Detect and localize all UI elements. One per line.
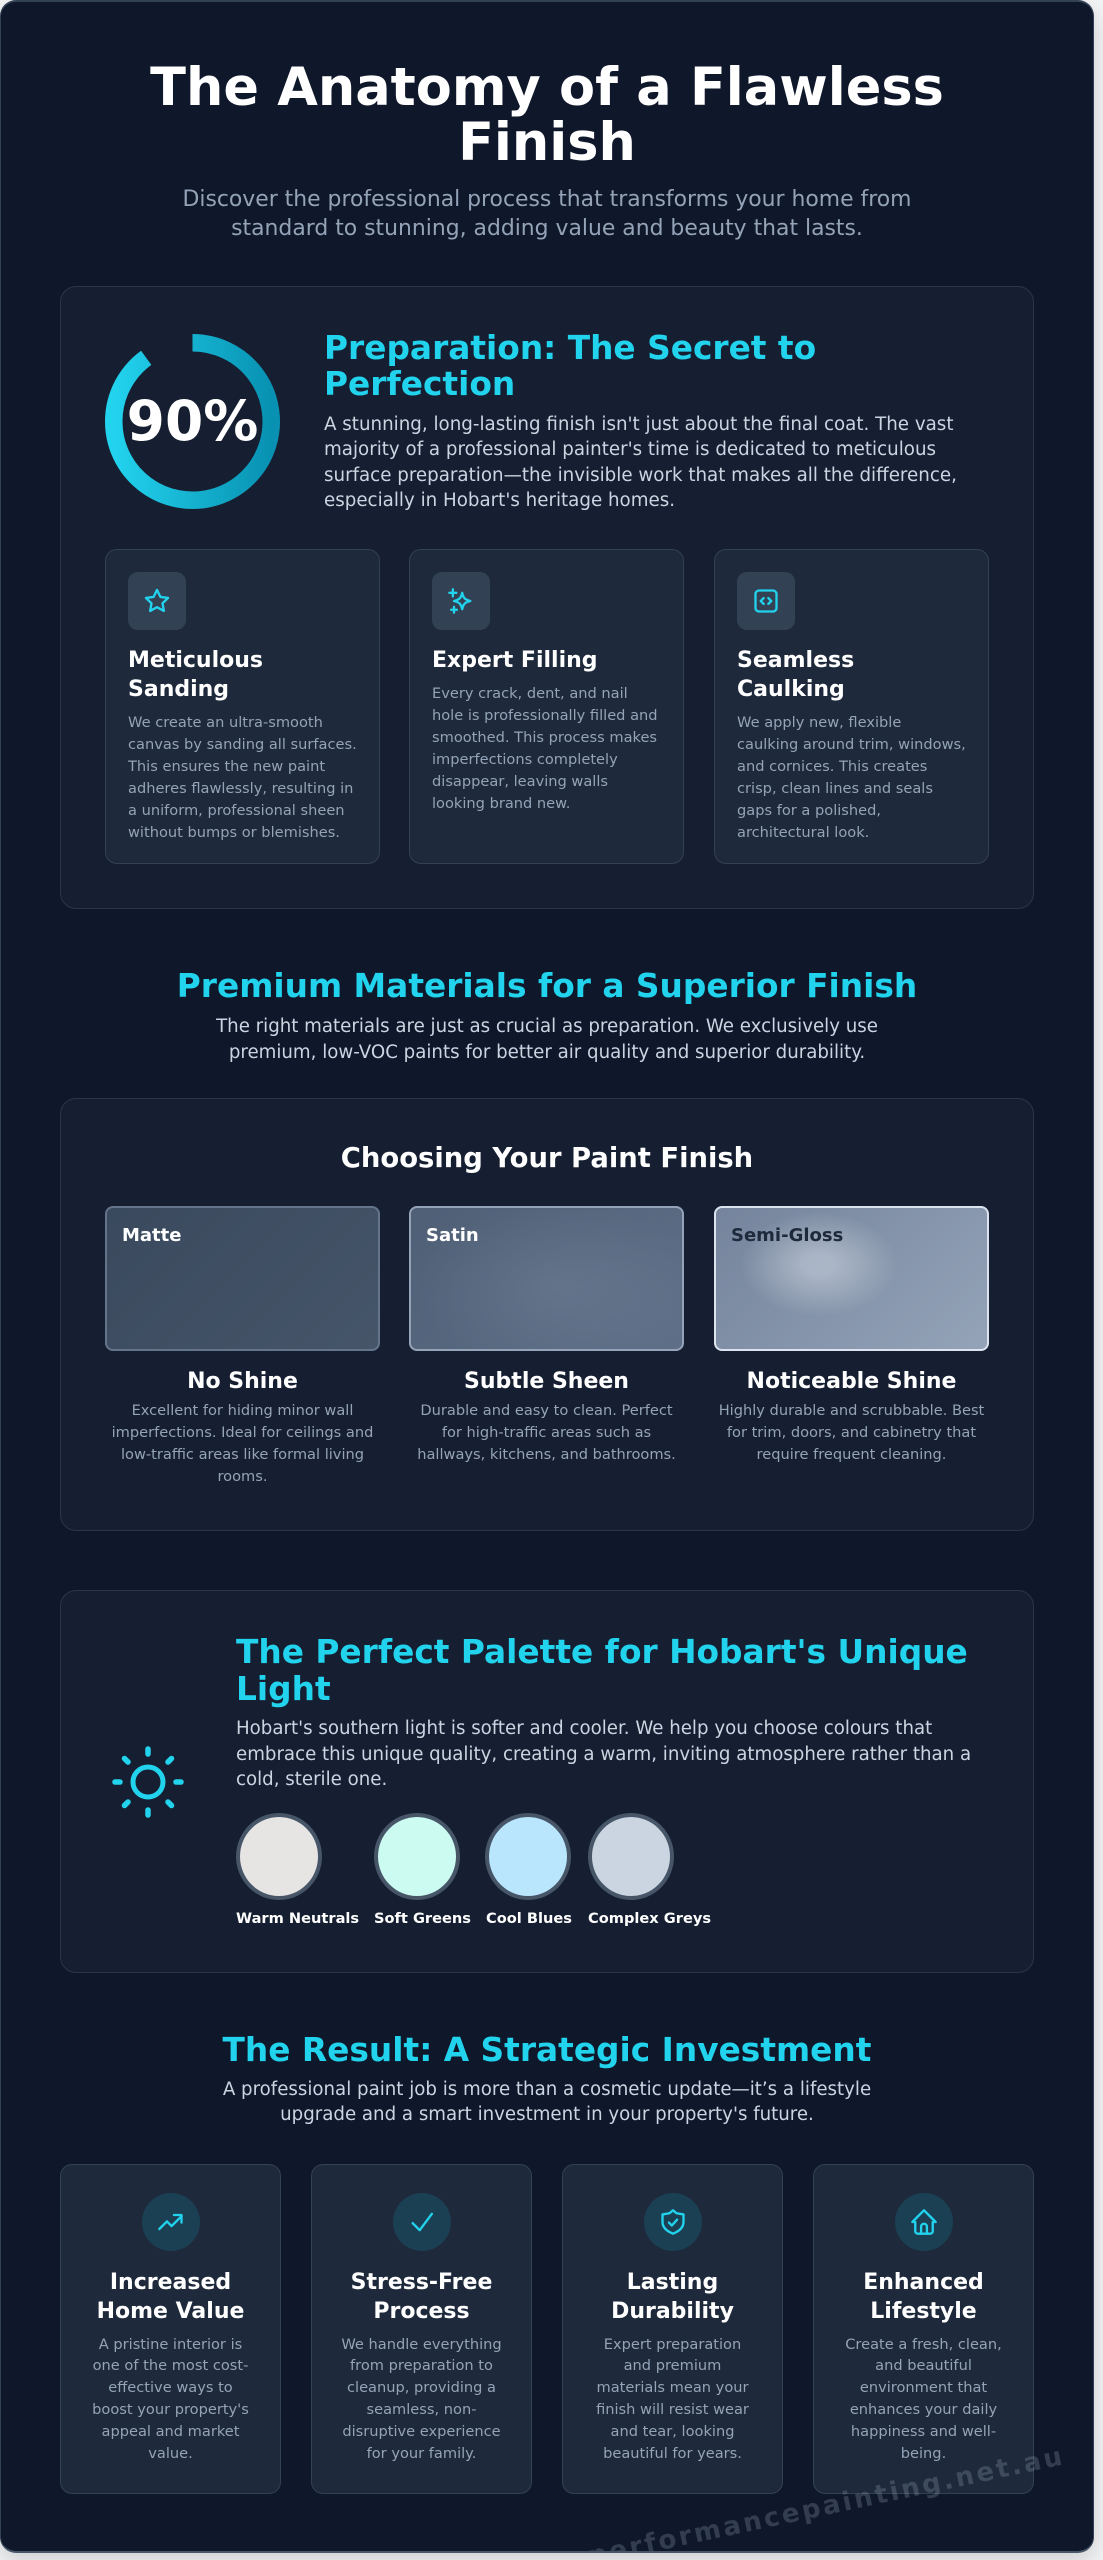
subtitle	[183, 187, 911, 240]
description: and tear, looking	[611, 2423, 734, 2440]
description	[92, 2336, 249, 2462]
description: looking brand new.	[432, 795, 570, 812]
swatch: satin	[409, 1206, 684, 1351]
title: Expert Filling	[432, 648, 598, 672]
description: finish will resist wear	[596, 2401, 749, 2418]
title: Increased	[110, 2270, 231, 2294]
label: cool blues: Cool Blues	[486, 1910, 572, 1926]
heading: preparation: Perfection	[324, 365, 515, 403]
card: meticulous sanding	[105, 549, 380, 864]
description: and premium	[624, 2357, 721, 2374]
description: for your family.	[367, 2445, 476, 2462]
heading: preparation	[324, 329, 816, 403]
finish: no shine: Excellent for hiding minor wall	[132, 1402, 353, 1419]
description: a uniform, professional sheen	[128, 802, 345, 819]
finish: no shine: imperfections. Ideal for ceilings and	[112, 1424, 373, 1441]
panel: preparation	[60, 286, 1034, 909]
title	[611, 2270, 734, 2324]
title: Seamless	[737, 648, 854, 672]
title	[351, 2270, 492, 2324]
title: Durability	[611, 2298, 734, 2324]
description: smoothed. This process makes	[432, 729, 657, 746]
paragraph: result: A professional paint job is more than a cosmetic update—it’s a lifestyle	[223, 2078, 871, 2100]
colour chip: warm neutrals	[236, 1813, 322, 1900]
description	[845, 2336, 1002, 2462]
colour chip: complex greys	[588, 1813, 674, 1900]
description: disappear, leaving walls	[432, 773, 608, 790]
description: crisp, clean lines and seals	[737, 780, 933, 797]
heading: palette: The Perfect Palette for Hobart's Unique	[236, 1633, 968, 1671]
description: hole is professionally filled and	[432, 707, 658, 724]
title: Home Value	[97, 2298, 244, 2324]
description: This ensures the new paint	[128, 758, 325, 775]
description	[596, 2336, 749, 2462]
description	[128, 714, 357, 841]
description: A pristine interior is	[99, 2336, 242, 2352]
description: and cornices. This creates	[737, 758, 927, 775]
paragraph: palette	[236, 1718, 971, 1790]
title	[737, 648, 854, 702]
description: value.	[148, 2445, 193, 2462]
card: expert filling	[409, 549, 684, 864]
finish: subtle sheen	[417, 1369, 676, 1463]
description: being.	[901, 2445, 946, 2462]
paragraph: result	[223, 2078, 871, 2125]
heading: choosing finish: Choosing Your Paint Finish	[341, 1143, 753, 1174]
description: effective ways to	[108, 2379, 233, 2396]
description: adheres flawlessly, resulting in	[128, 780, 353, 797]
description: happiness and well-	[851, 2423, 996, 2440]
description: beautiful for years.	[603, 2445, 742, 2462]
description: environment that	[860, 2379, 987, 2396]
description: and beautiful	[875, 2357, 972, 2374]
finish: no shine: No Shine	[187, 1369, 298, 1394]
swatch: satin: Satin	[426, 1225, 479, 1246]
label: complex greys: Complex Greys	[588, 1910, 711, 1926]
finish: subtle sheen: hallways, kitchens, and bathrooms.	[417, 1446, 676, 1463]
finish: subtle sheen: Subtle Sheen	[464, 1369, 629, 1394]
heading: palette: Light	[236, 1670, 331, 1708]
title: Lasting	[627, 2270, 718, 2294]
description: architectural look.	[737, 824, 869, 841]
finish: noticeable shine: require frequent cleaning.	[757, 1446, 946, 1463]
title	[150, 56, 944, 172]
finish: noticeable shine: Noticeable Shine	[747, 1369, 956, 1394]
paragraph: palette: embrace this unique quality, creating a warm, inviting atmosphere rather than a	[236, 1744, 971, 1765]
description	[737, 714, 966, 841]
icon: check	[393, 2193, 451, 2251]
description: We handle everything	[341, 2336, 502, 2352]
paragraph: materials: The right materials are just as crucial as preparation. We exclusively use	[216, 1016, 878, 1037]
title: Process	[373, 2298, 470, 2324]
description: enhances your daily	[850, 2401, 997, 2418]
description: We create an ultra-smooth	[128, 714, 323, 731]
colour chip: soft greens	[374, 1813, 460, 1900]
intro paragraph: surface preparation—the invisible work that makes all the difference,	[324, 465, 957, 486]
description: boost your property's	[92, 2401, 249, 2418]
heading: preparation: Preparation: The Secret to	[324, 329, 816, 367]
title: Finish	[458, 112, 636, 172]
icon: sparkles	[432, 572, 490, 630]
finish: no shine: low-traffic areas like formal living	[121, 1446, 364, 1463]
paragraph: palette: Hobart's southern light is softer and cooler. We help you choose colours that	[236, 1718, 932, 1739]
description	[432, 685, 658, 812]
donut chart: 90%: 90%	[127, 389, 258, 453]
benefit card: lasting durability	[562, 2164, 783, 2494]
title: The Anatomy of a Flawless	[150, 56, 944, 118]
icon: trend up	[142, 2193, 200, 2251]
intro paragraph: especially in Hobart's heritage homes.	[324, 490, 675, 511]
description	[341, 2336, 502, 2462]
description: seamless, non-	[367, 2401, 476, 2418]
benefit card: stress-free process	[311, 2164, 532, 2494]
icon: star	[128, 572, 186, 630]
paragraph: materials: premium, low-VOC paints for better air quality and superior durability.	[229, 1042, 865, 1063]
subtitle: standard to stunning, adding value and beauty that lasts.	[231, 216, 863, 240]
description: Create a fresh, clean,	[845, 2336, 1002, 2352]
paragraph: palette: cold, sterile one.	[236, 1769, 387, 1790]
swatch: semi-gloss	[714, 1206, 989, 1351]
donut chart: 90%	[105, 334, 280, 509]
title	[128, 648, 263, 702]
finish: noticeable shine: Highly durable and scrubbable. Best	[719, 1402, 984, 1419]
label: soft greens: Soft Greens	[374, 1910, 471, 1926]
finish: noticeable shine	[719, 1369, 984, 1463]
finish: subtle sheen: Durable and easy to clean. Perfect	[420, 1402, 673, 1419]
description: Expert preparation	[604, 2336, 741, 2352]
colour chip: cool blues	[485, 1813, 571, 1900]
icon: shield	[644, 2193, 702, 2251]
heading: premium materials: Premium Materials for a Superior Finish	[177, 966, 917, 1004]
panel: paint finishes	[60, 1098, 1034, 1531]
intro paragraph: A stunning, long-lasting finish isn't just about the final coat. The vast	[324, 414, 953, 434]
description: canvas by sanding all surfaces.	[128, 736, 357, 753]
panel: palette	[60, 1590, 1034, 1973]
finish: noticeable shine: for trim, doors, and cabinetry that	[727, 1424, 976, 1441]
description: cleanup, providing a	[347, 2379, 496, 2396]
description: without bumps or blemishes.	[128, 824, 340, 841]
icon: home	[895, 2193, 953, 2251]
title: Sanding	[128, 676, 229, 702]
subtitle: Discover the professional process that transforms your home from	[183, 187, 911, 212]
swatch: matte: Matte	[122, 1225, 181, 1246]
heading: the result: The Result: A Strategic Investment	[223, 2031, 871, 2069]
description: gaps for a polished,	[737, 802, 881, 819]
title: Meticulous	[128, 648, 263, 672]
swatch: semi-gloss: Semi-Gloss	[731, 1225, 843, 1246]
benefit card: increased home value	[60, 2164, 281, 2494]
finish: no shine	[112, 1369, 373, 1485]
icon: sun	[112, 1746, 184, 1818]
description: disruptive experience	[342, 2423, 501, 2440]
swatch: matte	[105, 1206, 380, 1351]
title: Enhanced	[863, 2270, 984, 2294]
paragraph: result: upgrade and a smart investment in your property's future.	[280, 2104, 814, 2125]
intro paragraph	[324, 414, 957, 511]
title: Stress-Free	[351, 2270, 492, 2294]
description: imperfections completely	[432, 751, 618, 768]
card: seamless caulking	[714, 549, 989, 864]
title: Caulking	[737, 676, 845, 702]
description: one of the most cost-	[93, 2357, 248, 2374]
finish: no shine: rooms.	[218, 1468, 268, 1485]
description: from preparation to	[350, 2357, 493, 2374]
title: Lifestyle	[870, 2298, 977, 2324]
label: warm neutrals: Warm Neutrals	[236, 1910, 359, 1926]
description: We apply new, flexible	[737, 714, 901, 731]
title	[97, 2270, 244, 2324]
description: appeal and market	[102, 2423, 239, 2440]
description: materials mean your	[596, 2379, 748, 2396]
finish: subtle sheen: for high-traffic areas such as	[442, 1424, 651, 1441]
icon: code box	[737, 572, 795, 630]
description: Every crack, dent, and nail	[432, 685, 628, 702]
title	[863, 2270, 984, 2324]
heading: palette	[236, 1633, 968, 1708]
intro paragraph: majority of a professional painter's time is dedicated to meticulous	[324, 439, 936, 460]
paragraph: materials	[216, 1016, 878, 1063]
benefit card: enhanced lifestyle	[813, 2164, 1034, 2494]
description: caulking around trim, windows,	[737, 736, 966, 753]
